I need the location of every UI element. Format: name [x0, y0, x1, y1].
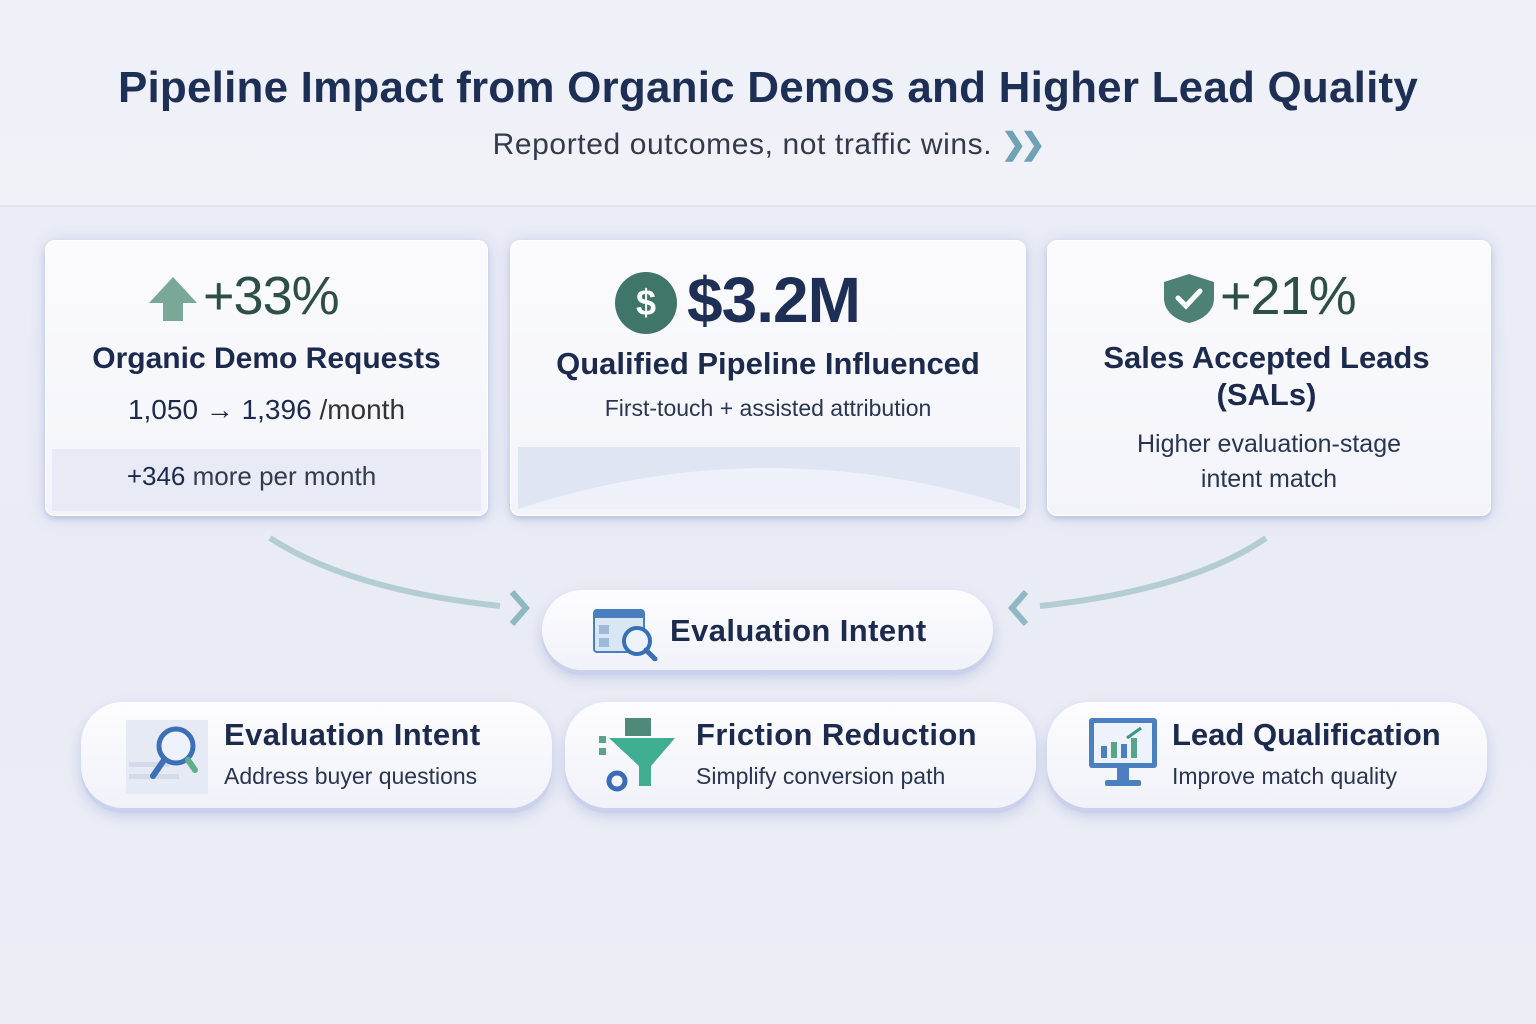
bottom band: +346 more per month	[127, 461, 376, 491]
label: Sales Accepted Leads	[1103, 340, 1430, 375]
arrow: left curve	[268, 536, 530, 626]
subtitle: Improve match quality	[1172, 763, 1397, 789]
sub text: First-touch + assisted attribution	[605, 395, 931, 421]
icon: dollar: $	[636, 282, 656, 323]
icon: monitor chart	[1089, 718, 1157, 786]
bottom band with arch	[518, 447, 1020, 509]
metric +21%: +21%	[1220, 266, 1356, 326]
label	[1103, 340, 1430, 412]
subtitle: Address buyer questions	[224, 763, 477, 789]
title: Evaluation Intent	[224, 717, 481, 752]
title: Pipeline Impact from Organic Demos and Higher Lead Quality	[118, 63, 1418, 112]
metric $3.2M: $3.2M	[687, 264, 860, 336]
sub text: Higher evaluation-stage	[1137, 430, 1401, 458]
arrow: right curve	[1008, 536, 1268, 626]
pill: friction reduction	[565, 702, 1036, 808]
bottom band	[52, 449, 481, 511]
panel: qualified pipeline	[510, 240, 1026, 516]
values: 1,050 → 1,396 /month	[128, 394, 405, 425]
subtitle: Reported outcomes, not traffic wins. ❯❯	[493, 128, 1039, 161]
icon: magnifier	[126, 720, 208, 794]
panel: organic demo requests	[45, 240, 488, 516]
label: Organic Demo Requests	[92, 342, 441, 375]
icon: browser search	[593, 609, 658, 661]
icon: shield	[1164, 274, 1214, 323]
title: Lead Qualification	[1172, 717, 1441, 752]
label: Qualified Pipeline Influenced	[556, 346, 980, 381]
title: Friction Reduction	[696, 717, 977, 752]
metric +33%: +33%	[203, 266, 339, 326]
header band	[0, 0, 1536, 207]
icon: funnel	[599, 718, 675, 792]
pill: evaluation intent	[81, 702, 552, 808]
pill: evaluation intent center	[542, 590, 993, 670]
label: Evaluation Intent	[670, 613, 927, 648]
subtitle: Simplify conversion path	[696, 763, 945, 789]
sub text	[1137, 430, 1401, 493]
icon: up arrow	[149, 277, 197, 321]
panel: SALs	[1047, 240, 1491, 516]
pill: lead qualification	[1047, 702, 1487, 808]
sub text: intent match	[1201, 465, 1337, 493]
icon: dollar	[615, 272, 677, 334]
label: (SALs)	[1217, 377, 1316, 412]
